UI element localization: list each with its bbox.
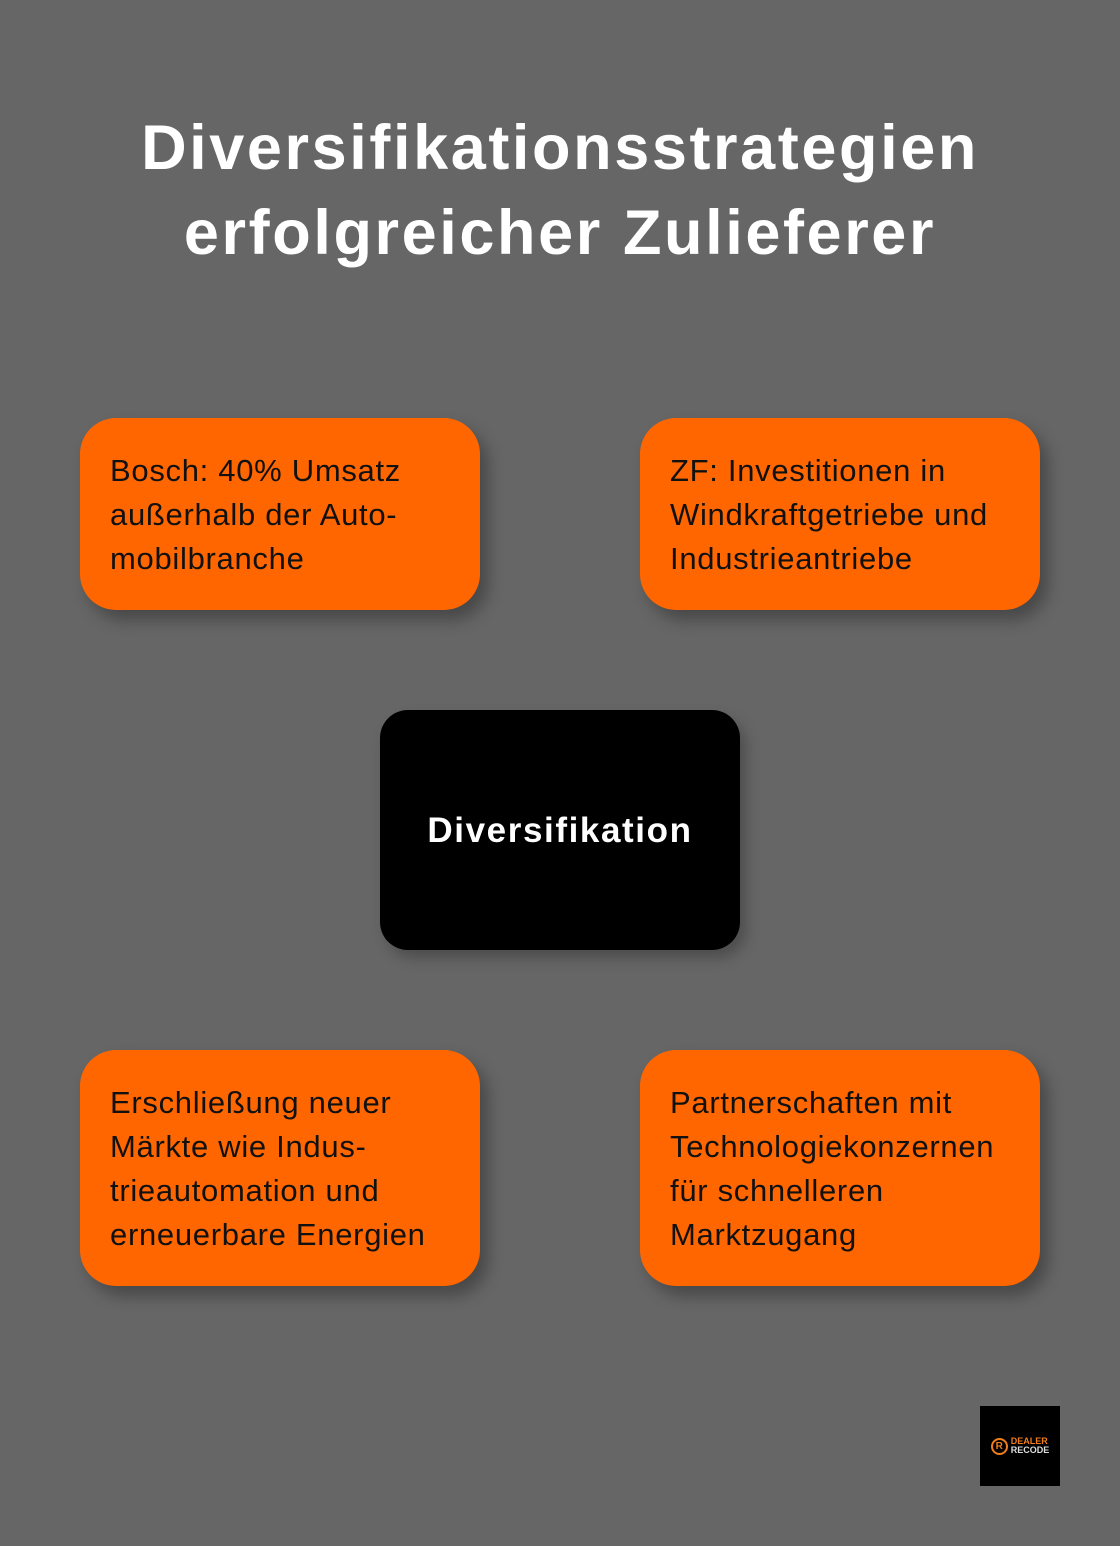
panel: new markets: Märkte wie Indus-	[110, 1129, 367, 1164]
panel: ZF: ZF: Investitionen in	[670, 453, 946, 488]
logo text	[1011, 1436, 1049, 1455]
panel: partnerships: Partnerschaften mit	[670, 1085, 952, 1120]
panel: partnerships: für schnelleren	[670, 1173, 884, 1208]
panel: new markets	[80, 1050, 480, 1286]
logo text: DEALER	[1011, 1436, 1048, 1446]
panel: new markets: trieautomation und	[110, 1173, 379, 1208]
panel: ZF: Industrieantriebe	[670, 541, 913, 576]
panel: Bosch: mobilbranche	[110, 541, 305, 576]
title: Diversifikationsstrategien	[141, 113, 979, 183]
center box: Diversifikation: Diversifikation	[427, 811, 693, 850]
panel: Bosch: Bosch: 40% Umsatz	[110, 453, 401, 488]
center box: Diversifikation	[380, 710, 740, 950]
icon: logo circle: R	[996, 1440, 1003, 1452]
panel: ZF: Windkraftgetriebe und	[670, 497, 988, 532]
icon: logo circle	[991, 1438, 1008, 1454]
panel: new markets: Erschließung neuer	[110, 1085, 391, 1120]
logo text: RECODE	[1011, 1445, 1049, 1455]
panel: partnerships: Marktzugang	[670, 1217, 857, 1252]
panel: partnerships	[640, 1050, 1040, 1286]
panel: Bosch: außerhalb der Auto-	[110, 497, 397, 532]
title: erfolgreicher Zulieferer	[184, 198, 936, 268]
panel: ZF	[640, 418, 1040, 610]
panel: new markets: erneuerbare Energien	[110, 1217, 426, 1252]
logo	[980, 1406, 1060, 1486]
panel: partnerships: Technologiekonzernen	[670, 1129, 994, 1164]
panel: Bosch	[80, 418, 480, 610]
title	[141, 113, 979, 268]
